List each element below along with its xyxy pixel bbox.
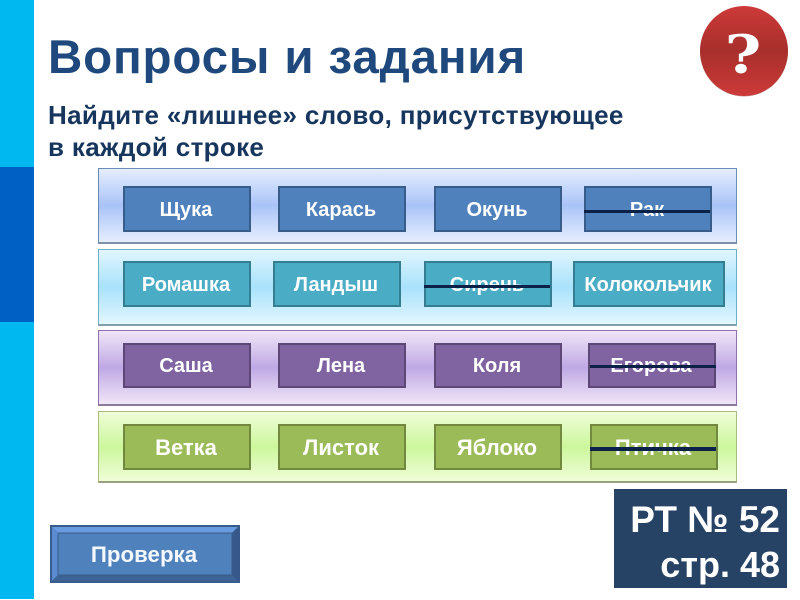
word: Щука (123, 186, 251, 232)
word: Саша: Саша (159, 355, 213, 377)
word: Ветка: Ветка (155, 435, 217, 460)
word: Окунь (434, 186, 562, 232)
strike line: Сирень (424, 285, 550, 288)
word: Колокольчик (573, 261, 725, 307)
word: Рак crossed out (584, 186, 712, 232)
workbook reference box: стр. 48 (660, 544, 780, 585)
icon: question mark (700, 6, 788, 96)
word: Егорова crossed out: Егорова (610, 355, 692, 377)
word: Рак crossed out: Рак (630, 198, 664, 220)
title: Вопросы и задания (48, 31, 526, 84)
word: Яблоко: Яблоко (457, 435, 537, 460)
word: Ромашка (123, 261, 251, 307)
instruction text: Найдите «лишнее» слово, присутствующее (48, 100, 624, 130)
word: Лена (278, 343, 406, 388)
strike line: Егорова (590, 365, 716, 368)
word: Птичка crossed out (590, 424, 718, 470)
sidebar (0, 0, 34, 599)
word: Щука: Щука (160, 198, 212, 220)
word: Листок: Листок (303, 435, 379, 460)
word: Листок (278, 424, 406, 470)
word: Коля (434, 343, 562, 388)
panel: names row (98, 330, 737, 406)
word: Яблоко (434, 424, 562, 470)
word: Коля: Коля (473, 355, 521, 377)
icon: question mark: ? (725, 24, 761, 86)
panel: tree row (98, 411, 737, 483)
word: Сирень crossed out: Сирень (450, 274, 524, 296)
instruction text (48, 100, 624, 162)
word: Сирень crossed out (424, 261, 552, 307)
check button: Проверка (91, 542, 198, 567)
word: Егорова crossed out (588, 343, 716, 388)
word: Ландыш: Ландыш (294, 274, 378, 296)
sidebar dark section (0, 167, 34, 322)
word: Саша (123, 343, 251, 388)
word: Карась: Карась (306, 198, 376, 220)
word: Карась (278, 186, 406, 232)
word: Ландыш (273, 261, 401, 307)
word: Ромашка: Ромашка (142, 274, 230, 296)
word: Окунь: Окунь (466, 198, 528, 220)
word: Птичка crossed out: Птичка (615, 435, 691, 460)
workbook reference box: РТ № 52 (630, 499, 780, 540)
strike line: Рак (584, 210, 710, 213)
word: Ветка (123, 424, 251, 470)
word: Колокольчик: Колокольчик (584, 274, 712, 296)
word: Лена: Лена (317, 355, 365, 377)
check button (50, 525, 240, 583)
workbook reference box (614, 489, 787, 588)
strike line: Птичка (590, 447, 716, 451)
instruction text: в каждой строке (48, 132, 264, 162)
panel: flowers row (98, 249, 737, 326)
panel: fish row (98, 168, 737, 244)
